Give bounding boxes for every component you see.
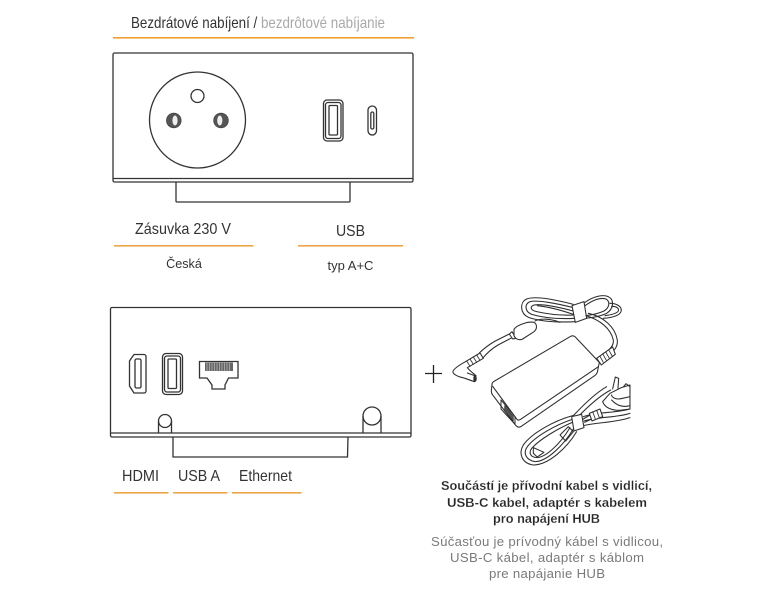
icon: Ethernet port xyxy=(200,362,238,389)
label: USB: typ A+C xyxy=(328,258,373,273)
icon: plus sign xyxy=(425,365,442,383)
caption: Czech: USB-C kabel, adaptér s kabelem xyxy=(447,495,647,510)
panel body xyxy=(113,53,413,182)
tray under panel xyxy=(173,437,348,457)
label: socket 230 V: Zásuvka 230 V xyxy=(135,221,231,238)
caption: Czech: Součástí je přívodní kabel s vidlicí, xyxy=(441,478,652,493)
caption: Slovak: USB-C kábel, adaptér s káblom xyxy=(450,550,644,565)
label: Ethernet xyxy=(232,468,302,494)
mains cable coil xyxy=(521,387,630,465)
label: USB: USB xyxy=(336,223,365,240)
caption: Czech: pro napájení HUB xyxy=(493,511,600,526)
panel: top socket unit xyxy=(113,53,413,202)
label: HDMI: HDMI xyxy=(122,468,159,485)
heading: wireless charging: Bezdrátové nabíjení / bezdrôtové nabíjanie xyxy=(131,15,385,32)
caption: Slovak xyxy=(431,534,663,581)
label: USB A xyxy=(173,468,228,494)
label: HDMI xyxy=(114,468,168,494)
icon: left screw xyxy=(158,414,172,433)
icon: HDMI port xyxy=(130,354,146,393)
caption: Slovak: pre napájanie HUB xyxy=(489,566,605,581)
adapter brick xyxy=(491,336,599,427)
icon: power socket 230 V xyxy=(150,72,246,168)
icon: right screw xyxy=(363,407,381,433)
mains plug xyxy=(603,377,630,410)
icon: USB A port xyxy=(162,354,182,394)
DC cable coil xyxy=(522,296,621,357)
tray under panel xyxy=(176,182,350,202)
icon: USB A port xyxy=(324,100,343,141)
label: USB xyxy=(298,223,403,273)
label: socket 230 V xyxy=(114,221,254,271)
DC plug xyxy=(453,353,483,382)
panel: bottom ports unit xyxy=(110,308,411,457)
label: Ethernet: Ethernet xyxy=(239,468,292,485)
ferrite and DC lead xyxy=(479,322,536,358)
icon: USB C port xyxy=(368,106,376,135)
label: USB A: USB A xyxy=(178,468,220,485)
panel body xyxy=(110,308,411,437)
caption: Slovak: Súčasťou je prívodný kábel s vidlicou, xyxy=(431,534,663,549)
label: socket 230 V: Česká xyxy=(166,256,202,271)
caption: Czech xyxy=(441,478,652,526)
illustration: power adapter with cables xyxy=(453,296,630,465)
strain relief xyxy=(597,347,615,365)
